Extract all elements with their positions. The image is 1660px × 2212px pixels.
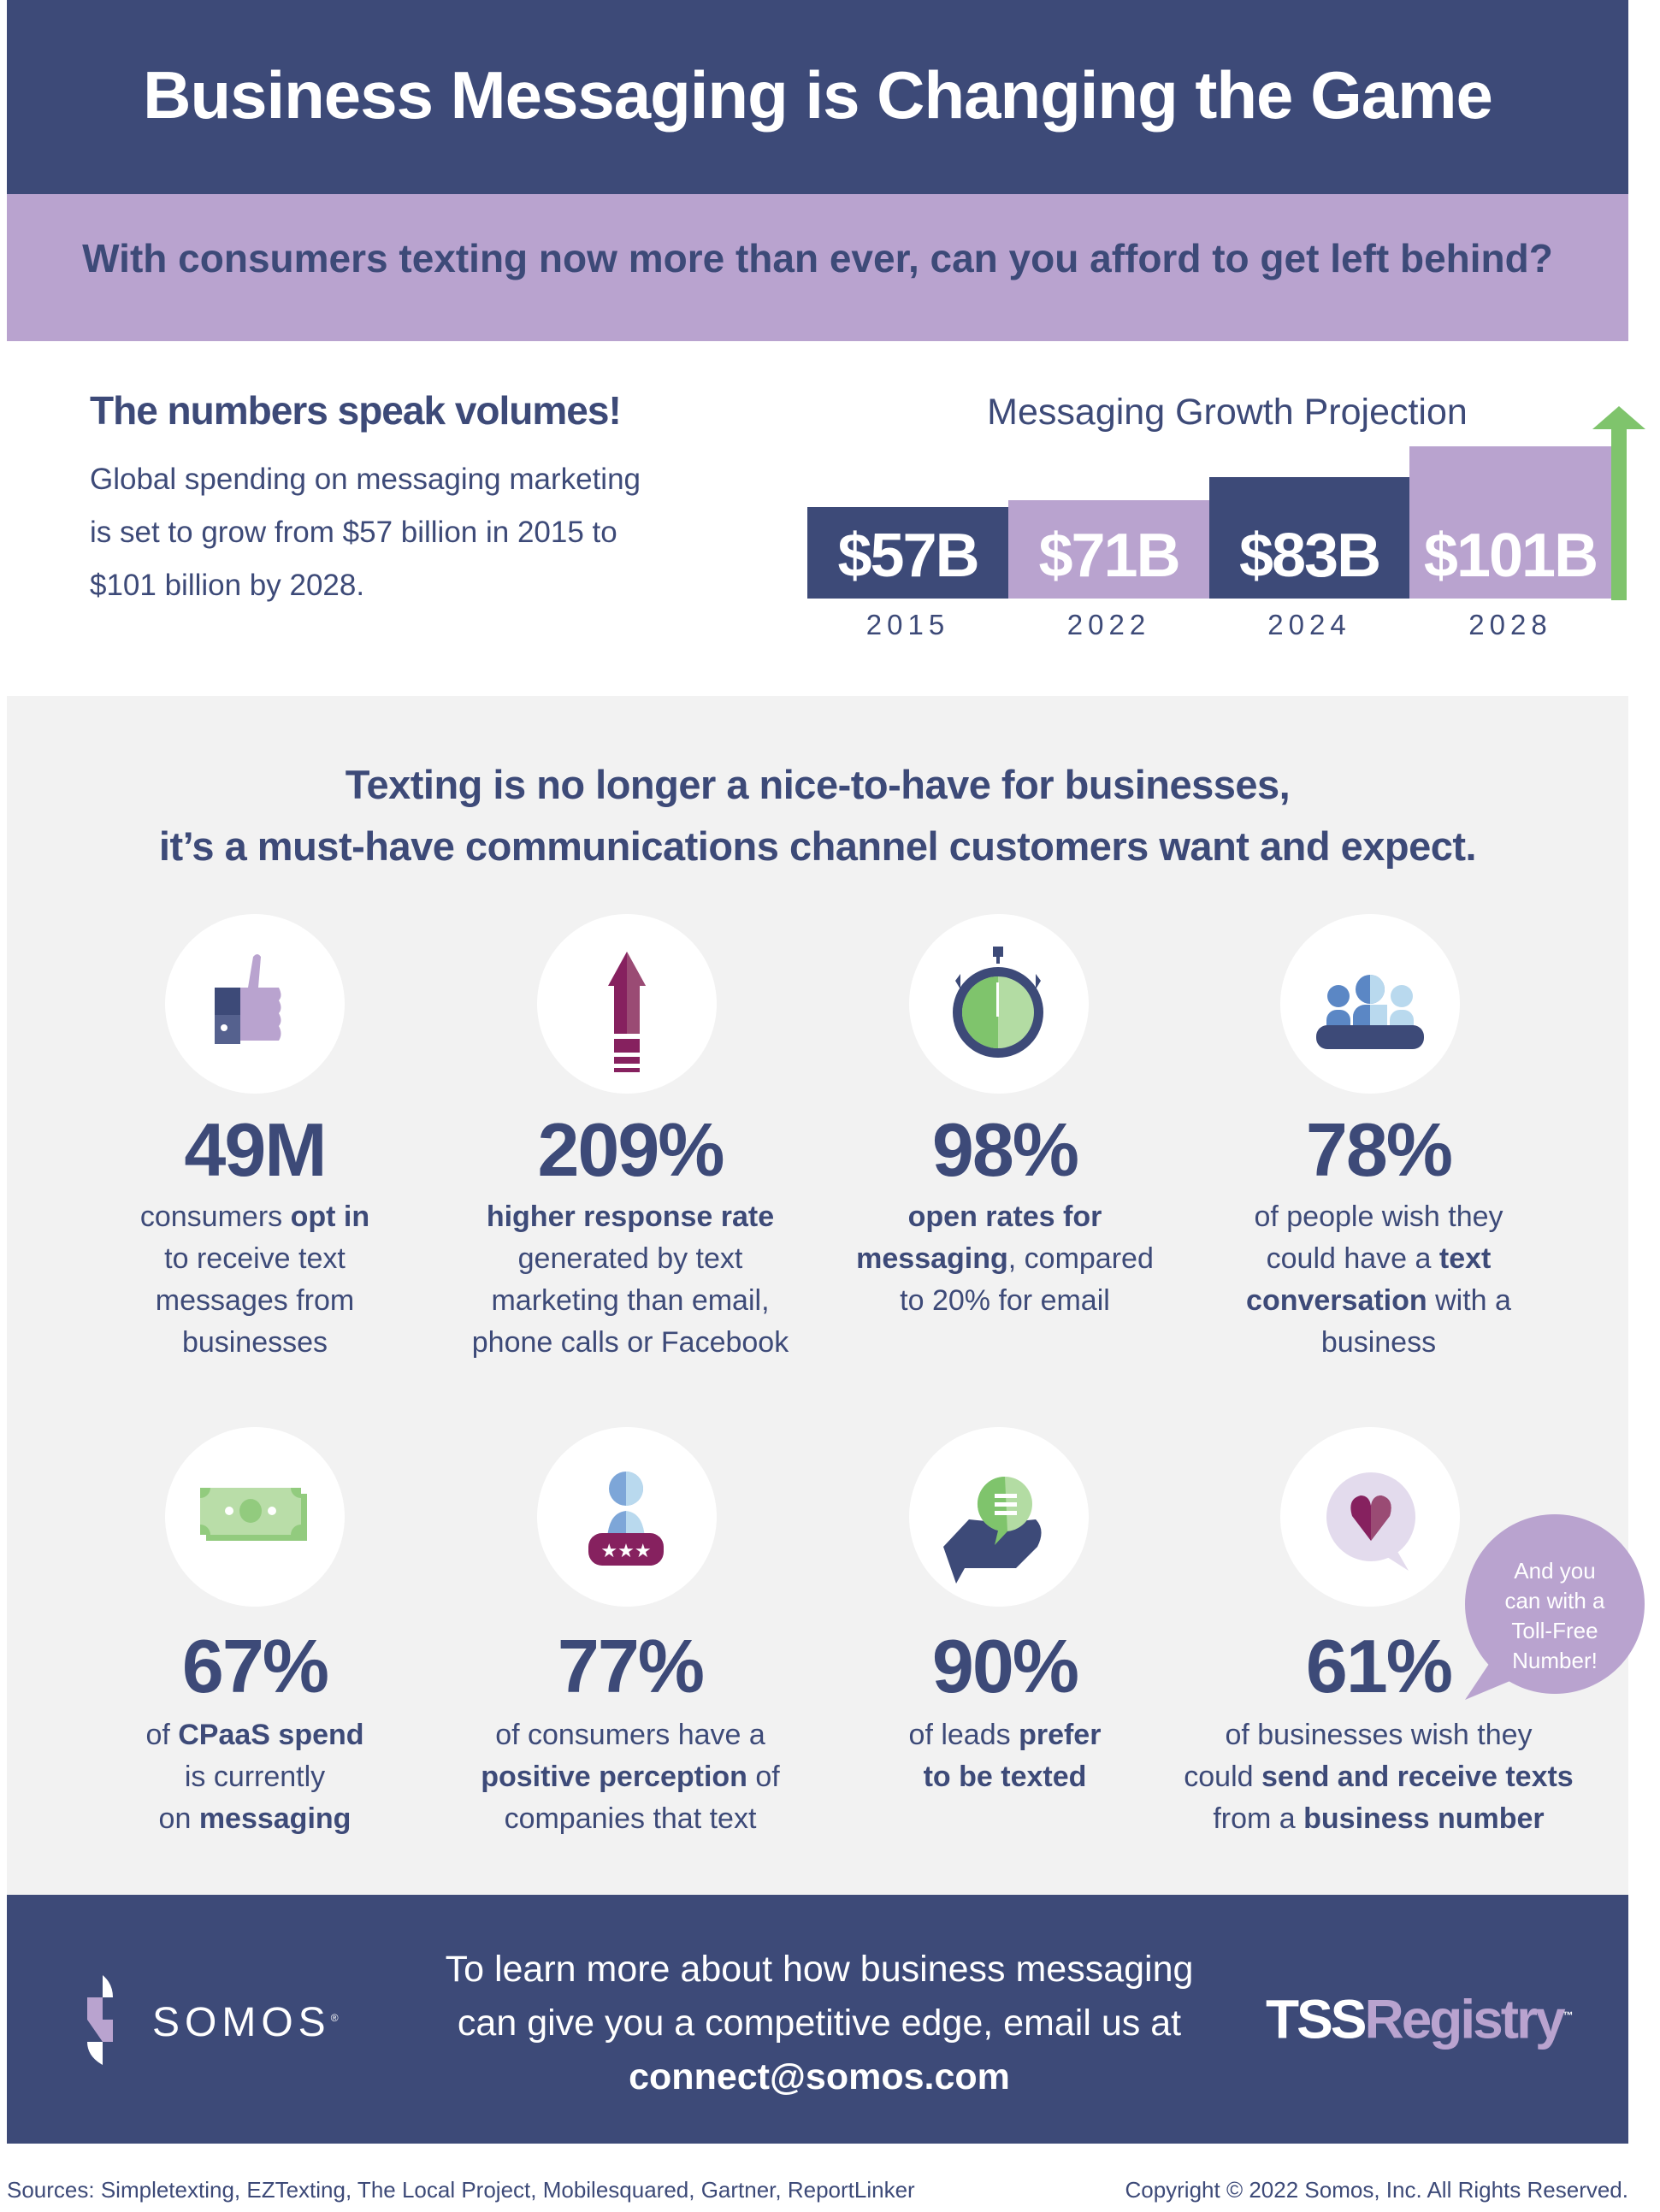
stat: 90%: to be texted <box>924 1761 1086 1793</box>
numbers heading: The numbers speak volumes! <box>90 388 621 433</box>
stat: 98%: 98% <box>932 1107 1078 1192</box>
logo: somos <box>87 1975 344 2065</box>
stat: 49M: 49M <box>184 1107 326 1192</box>
icon: chat hand <box>909 1427 1089 1607</box>
stat: 209%: 209% <box>537 1107 724 1192</box>
headline: Texting is no longer a nice-to-have for businesses, <box>346 762 1290 807</box>
stat: 98%: messaging, compared <box>856 1242 1154 1275</box>
stat: 67% <box>145 1624 364 1835</box>
bar 2024 <box>1209 477 1409 599</box>
stat: 61%: could send and receive texts <box>1184 1761 1574 1793</box>
logo: somos: SOMOS® <box>152 2000 344 2045</box>
arrow: growth <box>1592 406 1645 600</box>
headline: it’s a must-have communications channel customers want and expect. <box>159 823 1476 869</box>
footer call to action: connect@somos.com <box>629 2056 1010 2097</box>
stat: 78%: 78% <box>1306 1107 1451 1192</box>
numbers body text: Global spending on messaging marketing <box>90 463 641 496</box>
stat: 209%: generated by text <box>518 1242 742 1275</box>
icon: thumbs up <box>165 914 345 1094</box>
callout: toll-free: Number! <box>1512 1648 1598 1673</box>
stat: 77%: 77% <box>558 1624 703 1708</box>
stat: 77%: positive perception of <box>481 1761 780 1793</box>
stat: 90%: of leads prefer <box>909 1719 1101 1751</box>
stat: 67%: on messaging <box>159 1802 351 1835</box>
bar labels: $71B <box>1038 522 1179 590</box>
stat: 209%: phone calls or Facebook <box>472 1326 789 1359</box>
stat: 98% <box>856 1107 1154 1317</box>
footer call to action <box>446 1949 1193 2097</box>
subtitle band <box>7 194 1628 341</box>
stat: 209%: marketing than email, <box>491 1284 770 1317</box>
bar labels: $83B <box>1239 522 1379 590</box>
bar labels: $101B <box>1424 522 1597 590</box>
subtitle: With consumers texting now more than ever, can you afford to get left behind? <box>82 236 1553 280</box>
bar 2015 <box>807 507 1008 599</box>
copyright: Copyright © 2022 Somos, Inc. All Rights Reserved. <box>1125 2177 1628 2203</box>
panel: stats <box>7 696 1628 1895</box>
stat: 77%: of consumers have a <box>495 1719 765 1751</box>
header band <box>7 0 1628 194</box>
stat: 49M: messages from <box>156 1284 354 1317</box>
stat: 77%: companies that text <box>505 1802 756 1835</box>
icon: people <box>1280 914 1460 1094</box>
icon: money <box>165 1427 345 1607</box>
stat: 209%: higher response rate <box>487 1200 774 1233</box>
callout: toll-free <box>1465 1514 1645 1700</box>
stat: 78%: business <box>1321 1326 1436 1359</box>
numbers body text: $101 billion by 2028. <box>90 569 364 602</box>
sources: Sources: Simpletexting, EZTexting, The Local Project, Mobilesquared, Gartner, ReportLinker <box>7 2177 915 2203</box>
year labels: 2024 <box>1267 609 1351 640</box>
stat: 77% <box>481 1624 780 1835</box>
stat: 49M: consumers opt in <box>140 1200 369 1233</box>
stat: 90%: 90% <box>932 1624 1078 1708</box>
stat: 209% <box>472 1107 789 1359</box>
stat: 61%: from a business number <box>1213 1802 1545 1835</box>
bar chart <box>807 406 1645 640</box>
icon: person rating <box>537 1427 717 1607</box>
year labels: 2015 <box>866 609 949 640</box>
callout: toll-free: And you <box>1514 1558 1596 1584</box>
year labels: 2028 <box>1468 609 1552 640</box>
callout: toll-free: Toll-Free <box>1511 1618 1598 1643</box>
bar labels: $57B <box>837 522 978 590</box>
footer band <box>7 1895 1628 2144</box>
icon: stopwatch <box>909 914 1089 1094</box>
stat: 90% <box>909 1624 1101 1793</box>
stat: 61%: of businesses wish they <box>1225 1719 1533 1751</box>
stat: 67%: is currently <box>185 1761 325 1793</box>
footer call to action: can give you a competitive edge, email us at <box>458 2003 1181 2044</box>
stat: 49M: businesses <box>182 1326 328 1359</box>
stat: 49M: to receive text <box>164 1242 346 1275</box>
headline <box>159 762 1476 869</box>
stat: 61% <box>1184 1624 1574 1835</box>
stat: 98%: open rates for <box>908 1200 1102 1233</box>
stat: 49M <box>140 1107 369 1359</box>
icon: up arrow <box>537 914 717 1094</box>
chart title: Messaging Growth Projection <box>987 392 1468 433</box>
bar 2022 <box>1008 500 1209 599</box>
stat: 67%: 67% <box>182 1624 328 1708</box>
numbers body text: is set to grow from $57 billion in 2015 to <box>90 516 617 549</box>
bar 2028 <box>1409 446 1611 599</box>
numbers body text <box>90 463 641 602</box>
title: Business Messaging is Changing the Game <box>143 57 1492 133</box>
logo: TSSRegistry: TSSRegistry™ <box>1266 1988 1574 2050</box>
bar labels <box>837 522 1597 590</box>
footer call to action: To learn more about how business messaging <box>446 1949 1193 1990</box>
year labels <box>866 609 1552 640</box>
icon: heart bubble <box>1280 1427 1460 1607</box>
stat: 98%: to 20% for email <box>900 1284 1110 1317</box>
stat: 78%: of people wish they <box>1254 1200 1503 1233</box>
stat: 78%: conversation with a <box>1246 1284 1511 1317</box>
stat: 78% <box>1246 1107 1511 1359</box>
year labels: 2022 <box>1067 609 1150 640</box>
icon: person rating: ★★★ <box>600 1541 652 1562</box>
callout: toll-free: can with a <box>1504 1588 1605 1613</box>
stat: 67%: of CPaaS spend <box>145 1719 364 1751</box>
stat: 78%: could have a text <box>1267 1242 1491 1275</box>
stat: 61%: 61% <box>1306 1624 1451 1708</box>
